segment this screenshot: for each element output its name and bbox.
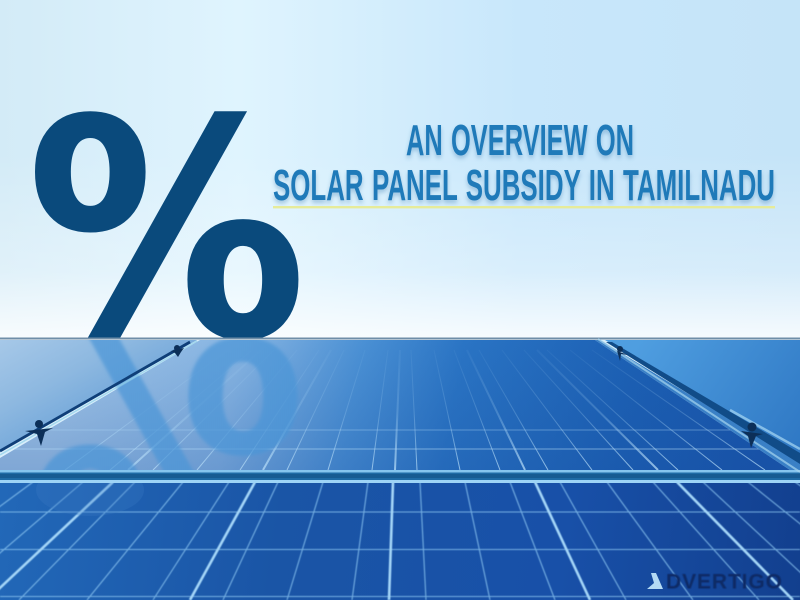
centre upper panel bbox=[0, 340, 790, 470]
solar panels bbox=[0, 338, 800, 600]
left rail bbox=[0, 341, 197, 455]
panel top edge bbox=[0, 338, 800, 340]
sky background bbox=[0, 0, 800, 340]
title line 1: AN OVERVIEW ON bbox=[406, 116, 634, 165]
title underline bbox=[273, 206, 775, 208]
left upper panel bbox=[0, 340, 197, 452]
wedge under right rail bbox=[595, 340, 800, 470]
reflection on lower panel bbox=[52, 483, 144, 516]
right upper panel bbox=[605, 340, 800, 462]
lower panel bbox=[0, 482, 800, 600]
left clamps bbox=[25, 345, 184, 446]
title shadow bbox=[273, 119, 775, 213]
logo icon bbox=[647, 573, 663, 589]
logo text: DVERTIGO bbox=[666, 570, 782, 594]
watermark logo bbox=[647, 570, 782, 594]
title shadow: AN OVERVIEW ON bbox=[406, 119, 634, 168]
right clamps bbox=[617, 346, 763, 448]
horizontal frame bbox=[0, 470, 800, 483]
lower panel grid bbox=[0, 482, 800, 600]
percent symbol: % bbox=[27, 57, 306, 406]
right rail bbox=[598, 339, 800, 472]
title bbox=[273, 116, 775, 213]
upper panel grid bbox=[0, 350, 800, 470]
